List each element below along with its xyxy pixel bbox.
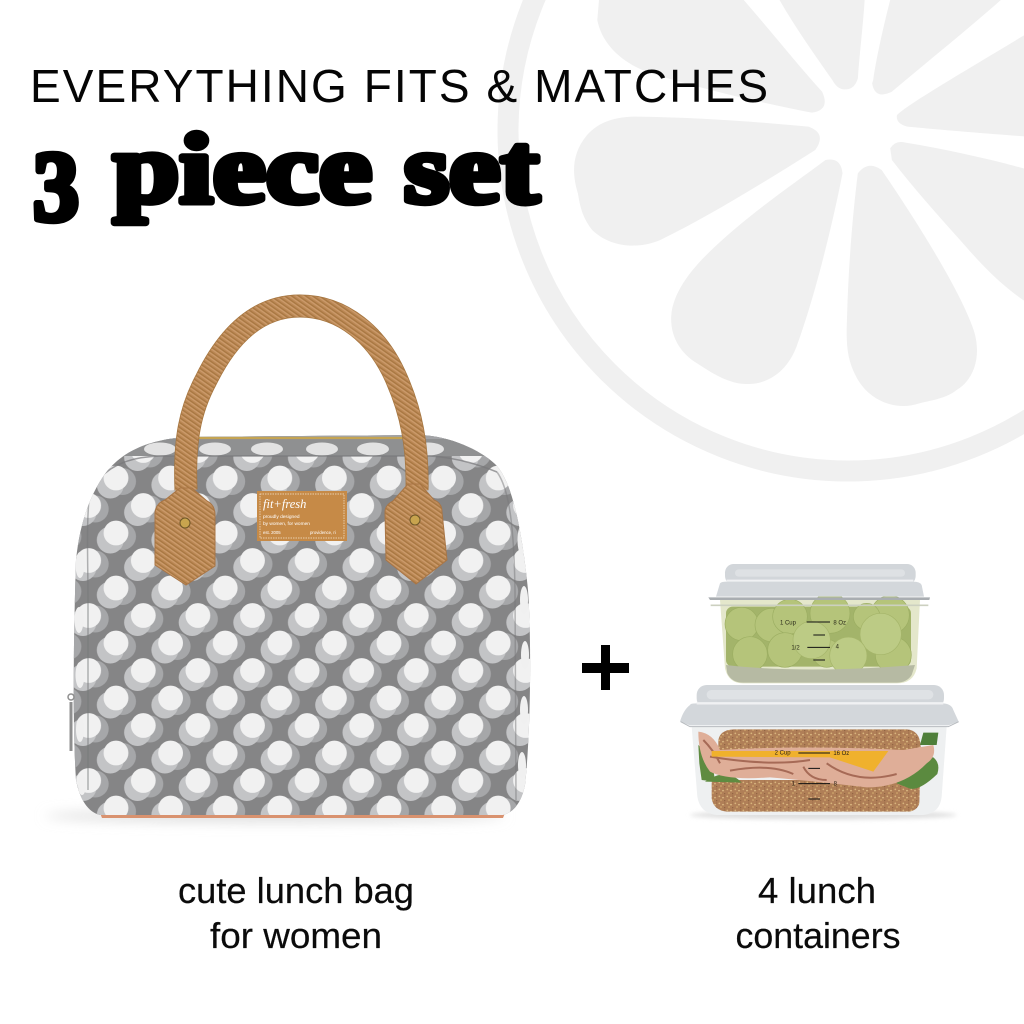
left handle tab — [155, 488, 215, 585]
caption: containers: 4 lunch — [758, 870, 876, 911]
caption: lunch bag: for women — [210, 915, 382, 956]
caption: containers — [736, 870, 900, 956]
small container measure marks — [780, 621, 846, 660]
large container with sandwich — [680, 685, 959, 815]
small container measure marks: 1 Cup — [780, 621, 797, 627]
bag bottom trim — [100, 813, 505, 818]
bag body with dot pattern — [74, 435, 530, 815]
brand label patch — [257, 491, 347, 541]
handle — [186, 306, 417, 490]
title: 3 piece set: set — [404, 113, 539, 224]
large container measure marks: 16 Oz — [833, 751, 849, 757]
heading: everything fits and matches: EVERYTHING FITS & MATCHES — [30, 60, 768, 112]
small container measure marks: 8 Oz — [833, 621, 846, 627]
background: citrus slice watermark — [508, 0, 1024, 471]
caption: lunch bag — [178, 870, 414, 956]
brand label patch: fit+fresh — [263, 497, 306, 511]
title: 3 piece set: 3 — [33, 131, 79, 242]
brand label patch: proudly designed — [263, 514, 300, 520]
title: 3 piece set — [33, 113, 539, 242]
title: 3 piece set: piece — [113, 113, 372, 224]
caption: lunch bag: cute lunch bag — [178, 870, 414, 911]
brand label patch: by women, for women — [263, 521, 310, 527]
caption: containers: containers — [736, 915, 900, 956]
zipper line — [198, 437, 406, 439]
zipper pull — [68, 694, 74, 751]
illustration: food containers — [680, 564, 959, 820]
large container measure marks — [775, 750, 849, 799]
large container measure marks: 2 Cup — [775, 750, 791, 756]
illustration: lunch bag — [45, 306, 550, 825]
large container measure marks: 1 — [792, 782, 796, 788]
small container with grapes — [708, 564, 930, 683]
right handle tab — [385, 484, 447, 584]
plus sign — [582, 645, 629, 690]
small container measure marks: 4 — [836, 645, 840, 651]
brand label patch: providence, ri — [310, 530, 336, 535]
large container measure marks: 8 — [834, 782, 838, 788]
brand label patch: est. 2005 — [263, 530, 281, 535]
small container measure marks: 1/2 — [791, 646, 800, 652]
